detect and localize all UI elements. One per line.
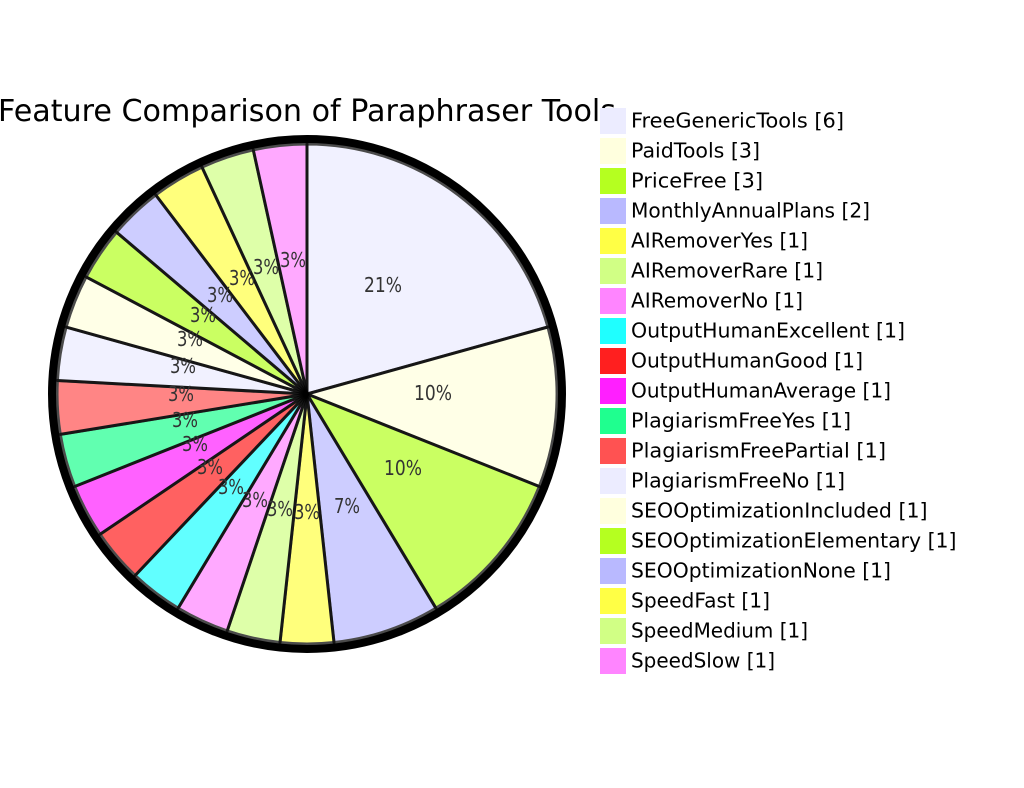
legend item: AIRemoverYes: AIRemoverYes [1]: [631, 228, 808, 252]
percentage labels: 3%: [197, 455, 223, 479]
percentage labels: 3%: [253, 255, 279, 279]
pie chart: [52, 139, 562, 649]
outer ring: [52, 139, 562, 649]
legend item: OutputHumanExcellent: OutputHumanExcellent [1]: [631, 318, 905, 342]
legend item: SEOOptimizationIncluded: SEOOptimizationIncluded [1]: [631, 498, 928, 522]
legend item: OutputHumanAverage: OutputHumanAverage [1]: [631, 378, 891, 402]
legend item: SpeedFast: SpeedFast [1]: [631, 588, 770, 612]
legend item: PaidTools: PaidTools [3]: [631, 138, 760, 162]
percentage labels: 3%: [182, 432, 208, 456]
legend item: PlagiarismFreeNo: PlagiarismFreeNo [1]: [631, 468, 845, 492]
legend item: SpeedSlow: SpeedSlow [1]: [631, 648, 775, 672]
legend item: OutputHumanGood: OutputHumanGood [1]: [631, 348, 863, 372]
legend item: FreeGenericTools: FreeGenericTools [6]: [631, 108, 844, 132]
legend item: PriceFree: PriceFree [3]: [631, 168, 763, 192]
percentage labels: 3%: [177, 327, 203, 351]
percentage labels: 3%: [172, 408, 198, 432]
percentage labels: 7%: [334, 494, 360, 518]
percentage labels: 3%: [190, 303, 216, 327]
legend item: SEOOptimizationElementary: SEOOptimizationElementary [1]: [631, 528, 956, 552]
chart title: Feature Comparison of Paraphraser Tools: [0, 94, 616, 129]
percentage labels: 3%: [207, 283, 233, 307]
percentage labels: 10%: [414, 381, 452, 405]
legend item: AIRemoverNo: AIRemoverNo [1]: [631, 288, 803, 312]
percentage labels: 10%: [384, 456, 422, 480]
percentage labels: 3%: [294, 500, 320, 524]
legend item: MonthlyAnnualPlans: MonthlyAnnualPlans [2]: [631, 198, 870, 222]
legend item: PlagiarismFreePartial: PlagiarismFreePartial [1]: [631, 438, 886, 462]
legend item: PlagiarismFreeYes: PlagiarismFreeYes [1]: [631, 408, 851, 432]
percentage labels: 3%: [242, 488, 268, 512]
percentage labels: 3%: [267, 497, 293, 521]
percentage labels: 3%: [218, 475, 244, 499]
percentage labels: [168, 248, 452, 524]
percentage labels: 3%: [170, 354, 196, 378]
legend: [600, 108, 956, 674]
legend item: SpeedMedium: SpeedMedium [1]: [631, 618, 808, 642]
pie slices: [57, 144, 557, 644]
percentage labels: 3%: [168, 382, 194, 406]
percentage labels: 3%: [280, 248, 306, 272]
legend item: SEOOptimizationNone: SEOOptimizationNone [1]: [631, 558, 891, 582]
percentage labels: 3%: [229, 266, 255, 290]
legend item: AIRemoverRare: AIRemoverRare [1]: [631, 258, 823, 282]
percentage labels: 21%: [364, 273, 402, 297]
